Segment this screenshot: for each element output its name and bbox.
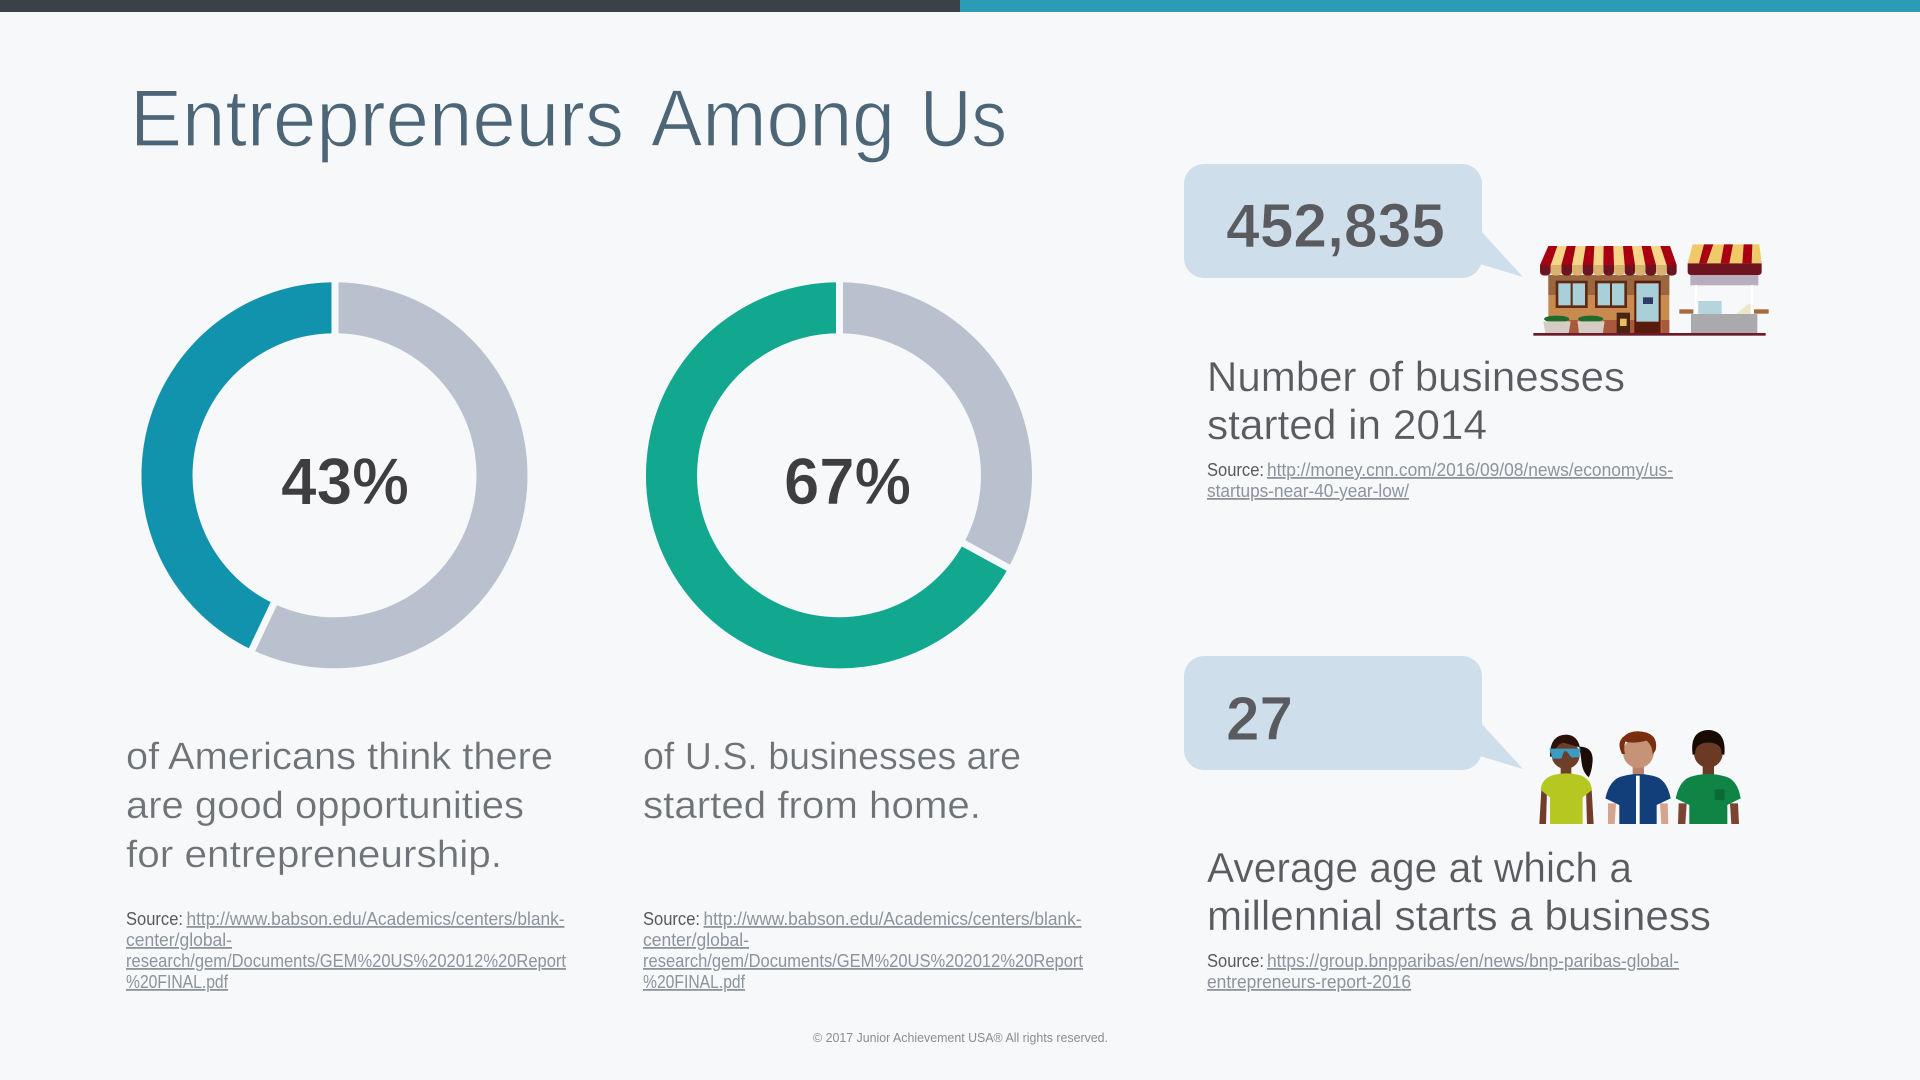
description text: started from home. (643, 785, 981, 827)
description text (126, 736, 553, 876)
source citation: http://www.babson.edu/Academics/centers/blank- (186, 909, 564, 929)
panel: businesses started (1184, 164, 1769, 501)
footer copyright: © 2017 Junior Achievement USA® All rights reserved. (813, 1030, 1108, 1045)
source citation: %20FINAL.pdf (126, 972, 229, 992)
source citation: Source: (643, 909, 700, 929)
panel: donut 67 percent (612, 248, 1083, 992)
source citation: center/global- (643, 930, 749, 950)
source citation: Source: (1207, 460, 1264, 480)
chart: donut 43% (112, 252, 557, 698)
value: 27: 27 (1226, 685, 1293, 754)
source citation: %20FINAL.pdf (643, 972, 746, 992)
value: 67%: 67% (784, 444, 911, 518)
description text (643, 736, 1021, 827)
heading (1207, 844, 1711, 939)
source citation: https://group.bnpparibas/en/news/bnp-paribas-global- (1267, 951, 1679, 971)
value: 43%: 43% (281, 444, 409, 518)
source citation: Source: (126, 909, 183, 929)
description text: are good opportunities (126, 785, 524, 827)
heading: Average age at which a (1207, 844, 1633, 891)
title: Us (920, 74, 1007, 164)
icon: storefront and market stall (1533, 244, 1769, 336)
source citation: entrepreneurs-report-2016 (1207, 972, 1411, 992)
figure: man in blue shirt (1605, 731, 1671, 824)
heading: started in 2014 (1207, 401, 1487, 448)
title: Among (651, 74, 895, 164)
source citation (643, 909, 1083, 992)
title: Entrepreneurs (130, 74, 624, 164)
source citation: startups-near-40-year-low/ (1207, 481, 1409, 501)
source citation: http://www.babson.edu/Academics/centers/blank- (704, 909, 1082, 929)
source citation: center/global- (126, 930, 232, 950)
heading: Number of businesses (1207, 353, 1625, 400)
source citation (126, 909, 566, 992)
figure: woman with sunglasses (1539, 735, 1594, 824)
source citation: research/gem/Documents/GEM%20US%202012%20Report (643, 951, 1083, 971)
top colour bar (0, 0, 1920, 12)
panel: donut 43 percent (112, 252, 566, 992)
heading: millennial starts a business (1207, 892, 1711, 939)
chart: donut 67% (612, 248, 1066, 703)
speech bubble (1184, 656, 1523, 770)
heading (1207, 353, 1625, 448)
icon: three young people (1539, 730, 1741, 824)
description text: of Americans think there (126, 736, 553, 778)
source citation: Source: (1207, 951, 1264, 971)
title (130, 74, 1007, 164)
source citation: research/gem/Documents/GEM%20US%202012%20Report (126, 951, 566, 971)
description text: of U.S. businesses are (643, 736, 1021, 778)
panel: average age (1184, 656, 1741, 992)
description text: for entrepreneurship. (126, 834, 502, 876)
value: 452,835: 452,835 (1226, 192, 1445, 261)
source citation: http://money.cnn.com/2016/09/08/news/economy/us- (1267, 460, 1673, 480)
speech bubble (1184, 164, 1523, 278)
source citation (1207, 460, 1673, 501)
source citation (1207, 951, 1679, 992)
figure: man in green shirt (1676, 730, 1741, 824)
